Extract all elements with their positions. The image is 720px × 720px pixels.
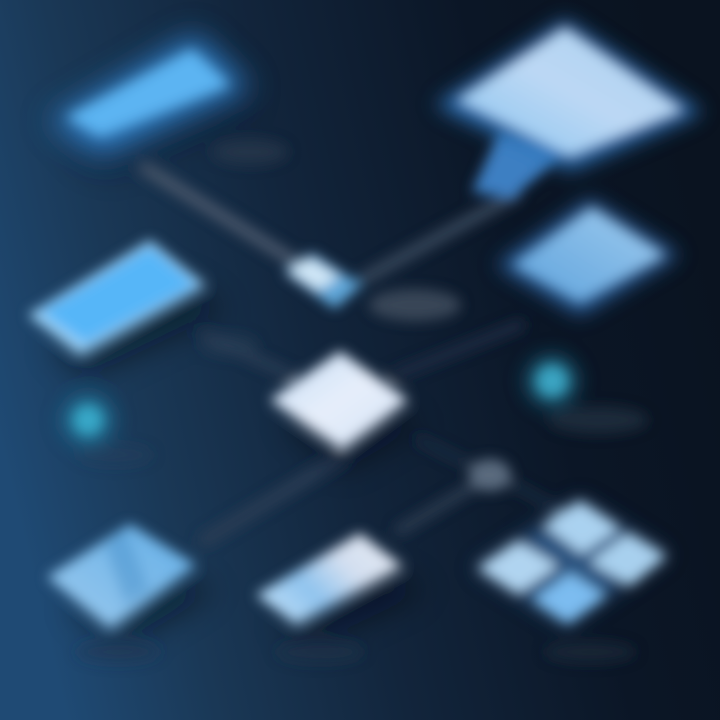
panel: bottom-left tiles: [47, 524, 215, 645]
tile: left: [478, 541, 558, 594]
label placeholder: right: [548, 406, 648, 434]
icon: grey dot: [469, 459, 511, 491]
panel: center small node: [284, 253, 362, 309]
icon: teal dot right: [527, 356, 577, 406]
panel: top-left card: [50, 35, 250, 170]
icon: teal dot left: [63, 395, 113, 445]
label placeholder: bottom-center: [276, 641, 364, 663]
panel: top-right large diamond: [436, 20, 702, 198]
panel: center diamond: [270, 351, 420, 470]
label placeholder: bottom-right: [544, 641, 636, 663]
panel: bottom-right tile cluster: [475, 500, 668, 625]
label placeholder: left: [77, 444, 153, 466]
label placeholder: top-left: [212, 139, 288, 165]
panel: middle-left card: [28, 240, 225, 375]
panel: right diamond: [498, 200, 678, 314]
connector lines: [145, 168, 560, 540]
label placeholder: bottom-left: [76, 641, 160, 663]
tile: right: [590, 533, 666, 586]
tile: bottom: [533, 573, 606, 624]
label placeholder: center: [369, 289, 461, 321]
label placeholder: middle-left: [202, 334, 258, 356]
panel: bottom-center card: [256, 533, 425, 645]
tile: top: [543, 501, 620, 554]
